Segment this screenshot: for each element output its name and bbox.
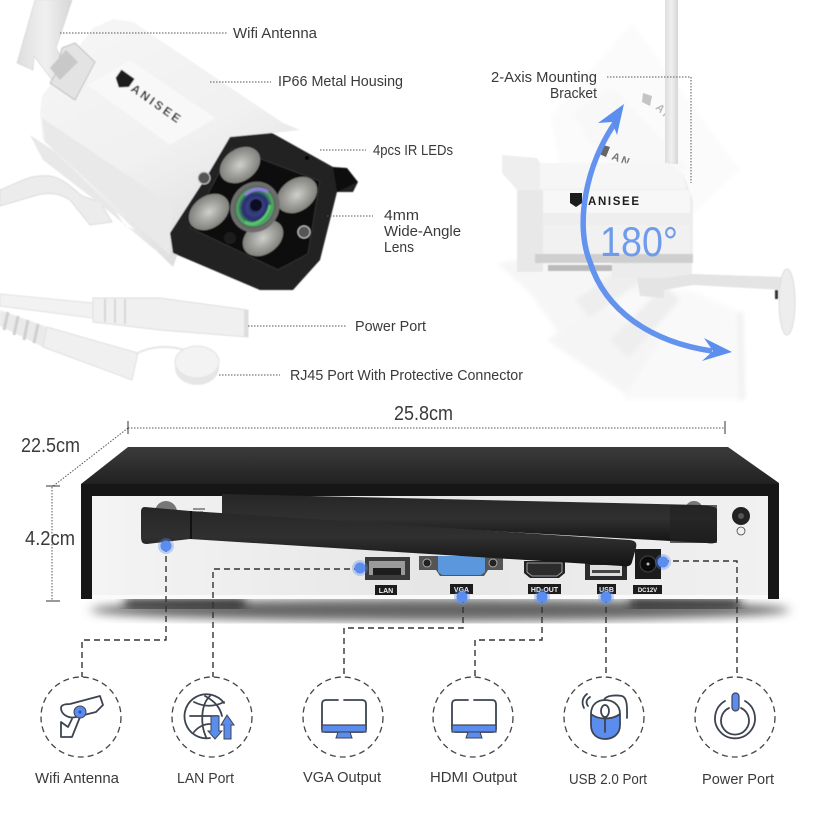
icon captions bbox=[35, 769, 775, 788]
callout lines for camera parts bbox=[60, 33, 691, 375]
rear frame bbox=[81, 484, 779, 599]
camera labels: RJ45 Port With Protective Connector bbox=[290, 367, 523, 384]
side logo: ANISEE bbox=[588, 196, 639, 208]
port labels bbox=[375, 584, 662, 595]
antenna sockets and earth terminal bbox=[155, 501, 750, 535]
camera housing bbox=[40, 19, 300, 267]
camera labels: 4pcs IR LEDs bbox=[373, 142, 453, 159]
USB port bbox=[585, 558, 627, 580]
side logo bbox=[570, 193, 639, 208]
NVR dimension lines bbox=[46, 421, 725, 601]
port labels: USB bbox=[599, 587, 614, 594]
ghost logos: AN bbox=[653, 102, 675, 124]
infrared LEDs bbox=[182, 139, 324, 264]
lens bbox=[220, 172, 290, 242]
camera labels: Bracket bbox=[550, 85, 598, 102]
camera labels: Lens bbox=[384, 239, 414, 256]
front face bbox=[170, 133, 358, 290]
NVR dimension labels: 22.5cm bbox=[21, 435, 80, 457]
rear antenna bbox=[222, 494, 717, 543]
icon: HDMI monitor bbox=[433, 677, 513, 757]
port labels: HD-OUT bbox=[531, 587, 559, 594]
top cover bbox=[81, 447, 779, 490]
brand logo bbox=[112, 70, 186, 128]
icon: wifi antenna camera bbox=[41, 677, 121, 757]
shadow bbox=[90, 599, 790, 621]
mounting bracket bbox=[637, 274, 783, 298]
camera labels: IP66 Metal Housing bbox=[278, 73, 403, 90]
port labels: VGA bbox=[454, 587, 469, 594]
side camera body bbox=[502, 155, 795, 335]
HDMI port bbox=[524, 561, 565, 578]
icon captions: HDMI Output bbox=[430, 769, 518, 786]
camera photo: bullet camera front view bbox=[0, 0, 358, 290]
ghost logos bbox=[597, 93, 675, 169]
ghost positions bbox=[497, 23, 745, 400]
antenna bbox=[17, 0, 73, 84]
icon: power button bbox=[695, 677, 775, 757]
camera labels: 4mm bbox=[384, 207, 419, 224]
dashed connector lines from ports to icons bbox=[82, 546, 737, 677]
front antenna bbox=[141, 507, 636, 566]
port labels: DC12V bbox=[638, 588, 657, 594]
VGA port bbox=[419, 556, 503, 576]
NVR recorder bbox=[81, 447, 790, 621]
icon captions: USB 2.0 Port bbox=[569, 771, 648, 788]
side camera with rotating ghost positions bbox=[497, 0, 795, 400]
NVR dimension labels bbox=[21, 403, 453, 550]
NVR dimension labels: 25.8cm bbox=[394, 403, 453, 425]
antenna bbox=[665, 0, 678, 164]
port labels: LAN bbox=[379, 588, 393, 595]
camera cables: power and RJ45 connectors bbox=[0, 294, 248, 385]
LAN port bbox=[365, 557, 410, 580]
icon captions: Power Port bbox=[702, 771, 775, 788]
camera labels: 2-Axis Mounting bbox=[491, 69, 597, 86]
icon: VGA monitor bbox=[303, 677, 383, 757]
brand logo: ANISEE bbox=[128, 81, 185, 127]
icon: USB mouse bbox=[564, 677, 644, 757]
icon captions: Wifi Antenna bbox=[35, 770, 120, 787]
rotation angle: 180° bbox=[600, 218, 678, 265]
camera labels bbox=[233, 25, 598, 384]
camera labels: Power Port bbox=[355, 318, 427, 335]
camera labels: Wifi Antenna bbox=[233, 25, 318, 42]
mounting arm bbox=[0, 176, 112, 225]
icon captions: VGA Output bbox=[303, 769, 382, 786]
NVR dimension labels: 4.2cm bbox=[25, 528, 75, 550]
DC power port bbox=[635, 549, 661, 579]
camera labels: Wide-Angle bbox=[384, 223, 461, 240]
180 degree rotation arrow bbox=[583, 104, 732, 361]
icon captions: LAN Port bbox=[177, 770, 235, 787]
rear panel bbox=[92, 496, 768, 599]
blue port markers bbox=[158, 538, 671, 605]
icon: LAN globe with arrows bbox=[172, 677, 252, 757]
ghost logos: AN bbox=[610, 151, 633, 169]
